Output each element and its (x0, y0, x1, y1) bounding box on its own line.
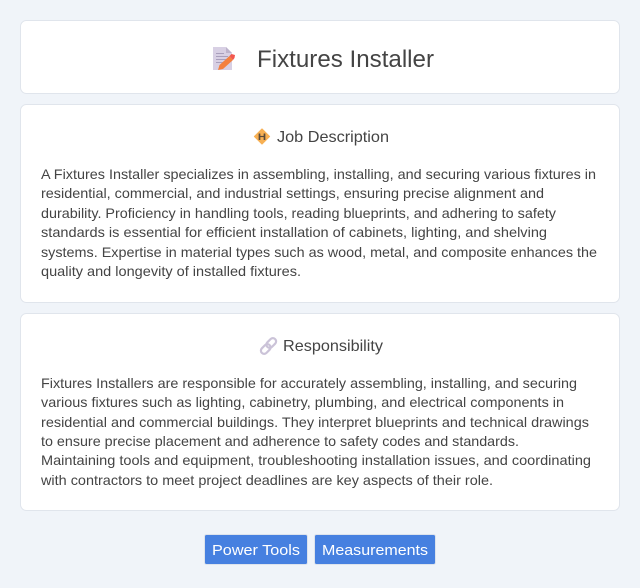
tag: measurements: Measurements (322, 543, 428, 559)
heading: job description: Job Description (277, 129, 389, 146)
job description text (41, 166, 597, 279)
panel: job description (20, 104, 620, 302)
icon: construction sign (254, 129, 270, 144)
tag: power tools: Power Tools (212, 543, 300, 559)
responsibility text: with contractors to meet project deadlines are key aspects of their role. (40, 472, 493, 488)
title text: Fixtures Installer (257, 46, 434, 73)
icon: chain link (260, 337, 277, 355)
responsibility text: Fixtures Installers are responsible for accurately assembling, installing, and securing (41, 375, 577, 391)
job description text: systems. Expertise in material types such as wood, metal, and composite enhances the (41, 244, 597, 260)
responsibility text: various fixtures such as lighting, cabinetry, plumbing, and electrical components in (41, 394, 564, 410)
job description text: residential, commercial, and industrial settings, ensuring precise alignment and (41, 185, 544, 201)
panel: responsibility (20, 314, 620, 510)
job description text: quality and longevity of installed fixtures. (41, 263, 301, 279)
job description text: standards is essential for efficient installation of cabinets, lighting, and shelving (41, 224, 547, 240)
responsibility text: to ensure precise placement and adherence to safety codes and standards. (41, 433, 519, 449)
responsibility text (40, 375, 591, 488)
job description text: durability. Proficiency in handling tools, reading blueprints, and adhering to safety (41, 205, 556, 221)
panel: title (20, 20, 620, 94)
tag: measurements (314, 534, 436, 564)
heading: responsibility: Responsibility (283, 338, 383, 355)
responsibility text: Maintaining tools and equipment, troubleshooting installation issues, and coordinating (41, 452, 591, 468)
responsibility text: residential and commercial buildings. They interpret blueprints and technical drawings (41, 414, 589, 430)
job description text: A Fixtures Installer specializes in assembling, installing, and securing various fixtures in (41, 166, 596, 182)
icon: document with pencil (213, 47, 235, 70)
tag: power tools (204, 534, 308, 564)
